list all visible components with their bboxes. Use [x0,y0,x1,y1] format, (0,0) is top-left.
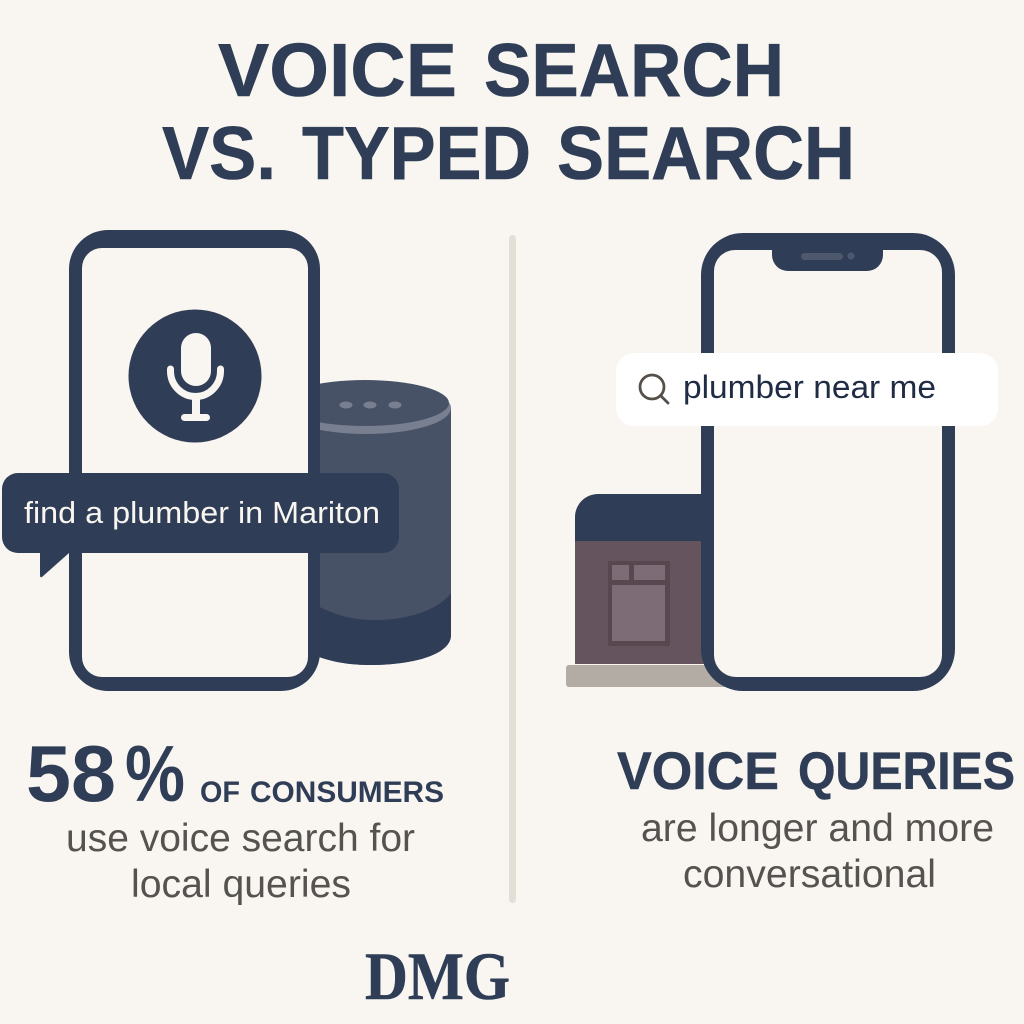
title: TYPED [302,111,531,195]
title: VS. [162,111,276,195]
search bar: plumber near me [683,369,936,405]
title: SEARCH [484,28,784,112]
stat: voice queries [617,742,1015,896]
illustration: typed search [566,233,998,691]
stat: voice search share: 58 [26,729,116,818]
search bar [616,353,998,426]
stat: voice search share [26,729,444,906]
logo: DMG: DMG [365,938,510,1014]
stat: voice search share: OF [200,776,240,809]
icon: smart speaker [281,380,451,665]
title: VOICE [218,28,457,112]
stat: voice search share: use voice search for [66,817,415,860]
title: SEARCH [557,111,855,195]
illustration: voice search [2,230,451,691]
stat: voice search share: local queries [131,863,351,906]
icon: microphone [128,310,262,442]
stat: voice queries: are longer and more [641,807,994,850]
icon: phone with notch [701,233,955,691]
icon: phone with microphone [69,230,320,691]
icon: laptop [566,494,731,687]
stat: voice search share: % [125,729,185,818]
stat: voice queries: VOICE [617,742,779,801]
stat: voice queries: conversational [683,853,936,896]
center divider [509,235,516,903]
stat: voice search share: CONSUMERS [250,776,444,809]
speech bubble: find a plumber in Mariton [24,495,380,530]
speech bubble [2,473,399,577]
title [162,28,855,195]
icon: magnifying glass [640,375,668,403]
